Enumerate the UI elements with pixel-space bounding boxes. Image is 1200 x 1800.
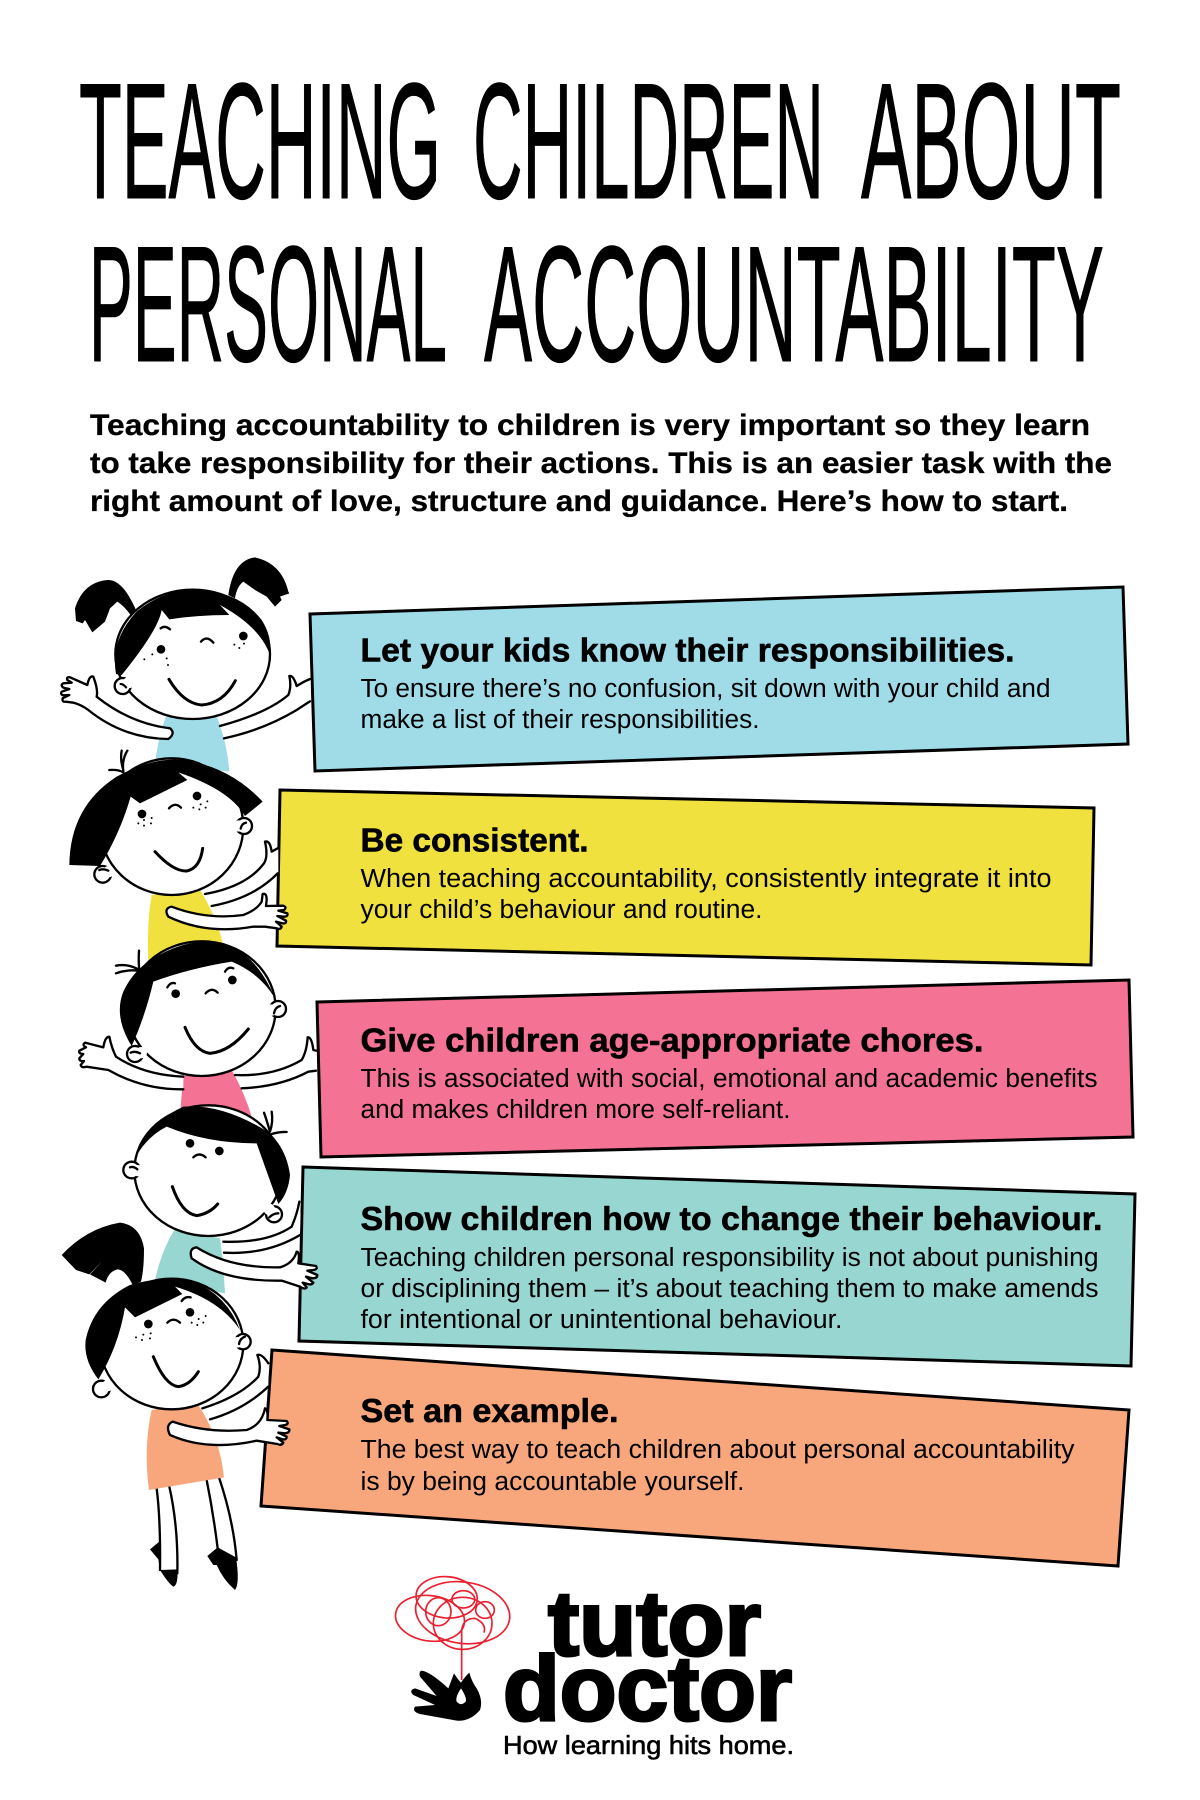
- heading: example: Set an example.: [360, 1392, 618, 1429]
- child 1: pigtails, blue dress: [61, 557, 311, 772]
- body: behaviour: for intentional or unintentional behaviour.: [360, 1306, 842, 1334]
- body: responsibilities: To ensure there’s no confusion, sit down with your child and: [360, 675, 1050, 703]
- panel: let your kids know: [310, 587, 1128, 771]
- title: TEACHING: [79, 49, 441, 233]
- intro text: right amount of love, structure and guidance. Here’s how to start.: [90, 485, 1068, 518]
- body: responsibilities: [360, 675, 1050, 734]
- child 4: short hair, teal dress: [123, 1105, 317, 1293]
- heading: behaviour: Show children how to change their behaviour.: [360, 1200, 1102, 1237]
- body: chores: [360, 1065, 1098, 1124]
- intro text: Teaching accountability to children is very important so they learn: [90, 409, 1090, 442]
- heading: responsibilities: Let your kids know their responsibilities.: [360, 632, 1014, 668]
- title: PERSONAL: [89, 212, 447, 396]
- body: responsibilities: make a list of their responsibilities.: [360, 706, 760, 734]
- body: example: [360, 1436, 1075, 1496]
- panel: age-appropriate chores: [317, 980, 1133, 1157]
- panel: be consistent: [277, 790, 1094, 965]
- body: consistent: When teaching accountability, consistently integrate it into: [360, 865, 1052, 893]
- title: [79, 49, 1121, 396]
- body: behaviour: or disciplining them – it’s about teaching them to make amends: [360, 1275, 1098, 1303]
- child 2: bob hair, yellow dress: [69, 751, 288, 962]
- body: example: is by being accountable yourself.: [360, 1468, 744, 1496]
- wordmark: [503, 1573, 792, 1740]
- body: consistent: your child’s behaviour and routine.: [360, 896, 762, 924]
- child 5: ponytail, orange dress, legs and shoes: [62, 1223, 289, 1590]
- wordmark: doctor: [503, 1638, 792, 1740]
- body: behaviour: [360, 1244, 1098, 1334]
- body: chores: and makes children more self-reliant.: [360, 1096, 790, 1124]
- intro text: to take responsibility for their actions. This is an easier task with the: [90, 447, 1112, 480]
- body: consistent: [360, 865, 1052, 924]
- intro text: [90, 409, 1112, 518]
- illustration: stacked children: [61, 557, 317, 1590]
- child 3: short hair, pink dress: [79, 941, 317, 1120]
- logo: tutor doctor: [393, 1573, 794, 1760]
- heading: chores: Give children age-appropriate chores.: [360, 1022, 984, 1058]
- tagline: How learning hits home.: [503, 1730, 794, 1760]
- icon: brain scribble and hand: [393, 1574, 514, 1721]
- body: example: The best way to teach children about personal accountability: [360, 1436, 1075, 1464]
- panel: set an example: [261, 1350, 1129, 1566]
- body: behaviour: Teaching children personal responsibility is not about punishing: [360, 1244, 1098, 1272]
- heading: consistent: Be consistent.: [360, 822, 588, 858]
- wordmark: tutor: [548, 1573, 761, 1675]
- body: chores: This is associated with social, emotional and academic benefits: [360, 1065, 1098, 1093]
- panel: change behaviour: [299, 1167, 1135, 1366]
